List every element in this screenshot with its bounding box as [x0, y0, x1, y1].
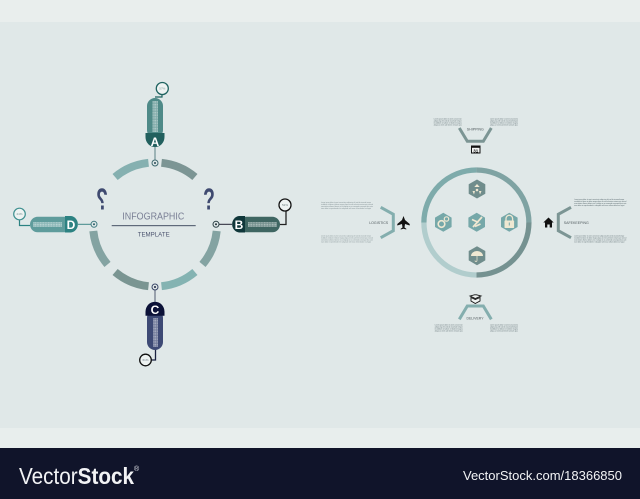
- text block: logistics top: Lorem ipsum dolor sit amet consectetur adipiscing elit sed do eiusmod tempor: [321, 201, 371, 204]
- text block: delivery right: aliqua ut enim ad minim veniam quis: [490, 330, 519, 332]
- pill A: A: [151, 135, 160, 149]
- text block: shipping left: Lorem ipsum dolor sit amet consectetur: [434, 117, 462, 120]
- pill A: 57%: [159, 86, 166, 90]
- text block: delivery right: incididunt ut labore et dolore magna: [490, 328, 519, 330]
- text block: logistics bottom: exercitation ullamco laboris nisi ut aliquip ex ea commodo consequat duis aute: [321, 238, 374, 242]
- text block: delivery right: adipiscing elit sed do eiusmod tempor: [490, 326, 518, 328]
- icon: house: [543, 218, 554, 228]
- pill D: [14, 208, 97, 232]
- question mark right: ?: [203, 183, 215, 217]
- footer registered mark: ®: [134, 465, 140, 473]
- hexagon: airplane: [468, 213, 485, 232]
- icon: airplane: [397, 216, 410, 230]
- pill C: 61%: [142, 358, 149, 362]
- pill B: [213, 199, 291, 232]
- hexagon: padlock: [501, 213, 518, 232]
- footer logo: VectorStock: [19, 463, 134, 489]
- icon: calendar: 31: [473, 149, 479, 154]
- text block: logistics bottom: [321, 234, 374, 244]
- label: safekeeping: SAFEKEEPING: [564, 221, 589, 225]
- text block: shipping left: aliqua ut enim ad minim veniam quis: [434, 123, 462, 126]
- pill D: D: [67, 218, 76, 232]
- text block: logistics top: exercitation ullamco laboris nisi ut aliquip ex ea commodo consequat duis aute: [321, 205, 374, 208]
- top light band: [0, 0, 640, 22]
- text block: logistics bottom: irure dolor in reprehenderit in voluptate velit esse cillum dolore eu fugiat: [321, 240, 371, 244]
- text block: logistics top: [321, 201, 374, 210]
- label: delivery: DELIVERY: [466, 317, 484, 321]
- footer bar: [0, 448, 640, 499]
- text block: logistics bottom: Lorem ipsum dolor sit amet consectetur adipiscing elit sed do eiusmod tempor: [321, 234, 371, 238]
- text block: delivery left: [435, 324, 463, 332]
- chevron: delivery: [459, 306, 491, 319]
- text block: delivery right: Lorem ipsum dolor sit amet consectetur: [490, 324, 518, 326]
- title text: INFOGRAPHIC TEMPLATE: INFOGRAPHIC: [122, 212, 184, 222]
- text block: delivery left: incididunt ut labore et dolore magna: [435, 328, 463, 330]
- chevron: logistics: [381, 207, 393, 238]
- title text: INFOGRAPHIC TEMPLATE: TEMPLATE: [138, 232, 170, 238]
- text block: delivery right: [490, 324, 519, 332]
- text block: delivery left: Lorem ipsum dolor sit amet consectetur: [435, 324, 463, 326]
- icon: box: [470, 295, 481, 304]
- text block: safekeeping top: [574, 198, 627, 207]
- pill A: [146, 82, 168, 166]
- footer url: VectorStock.com/18366850: [463, 468, 622, 483]
- right infographic: ring: [424, 170, 529, 275]
- pill D: 24%: [16, 212, 23, 216]
- chevron: safekeeping: [558, 207, 571, 238]
- text block: logistics top: irure dolor in reprehenderit in voluptate velit esse cillum dolore eu fugiat: [321, 207, 371, 210]
- text block: shipping right: incididunt ut labore et dolore magna: [490, 121, 519, 124]
- text block: shipping right: [490, 117, 519, 126]
- pill C: [140, 284, 164, 366]
- text block: shipping right: adipiscing elit sed do eiusmod tempor: [490, 119, 518, 122]
- text block: safekeeping bottom: [574, 234, 627, 244]
- bottom light band: [0, 428, 640, 448]
- text block: delivery left: adipiscing elit sed do eiusmod tempor: [435, 326, 463, 328]
- text block: shipping right: Lorem ipsum dolor sit amet consectetur: [490, 117, 518, 120]
- title text: INFOGRAPHIC TEMPLATE: [112, 212, 196, 238]
- text block: shipping left: [434, 117, 462, 126]
- icon: calendar: [472, 146, 480, 154]
- text block: shipping left: adipiscing elit sed do eiusmod tempor: [434, 119, 462, 122]
- question mark left: ?: [96, 183, 108, 217]
- label: logistics: LOGISTICS: [369, 221, 389, 225]
- text block: shipping right: aliqua ut enim ad minim veniam quis: [490, 123, 519, 126]
- hexagon: gears: [435, 213, 452, 232]
- pill B: 52%: [282, 203, 288, 207]
- text block: logistics top: incididunt ut labore et dolore magna aliqua ut enim ad minim veniam quis nostrud: [321, 203, 374, 206]
- text block: shipping left: incididunt ut labore et dolore magna: [434, 121, 462, 124]
- pill C: C: [151, 303, 160, 317]
- hexagon: umbrella: [469, 246, 485, 265]
- text block: delivery left: aliqua ut enim ad minim veniam quis: [435, 330, 463, 332]
- pill B: B: [235, 218, 244, 232]
- label: shipping: SHIPPING: [467, 128, 484, 132]
- left infographic: segmented ring: [93, 163, 217, 286]
- hexagon: radiation: [469, 180, 485, 198]
- text block: logistics bottom: incididunt ut labore et dolore magna aliqua ut enim ad minim veniam quis nostrud: [321, 236, 374, 240]
- chevron: shipping: [459, 128, 491, 141]
